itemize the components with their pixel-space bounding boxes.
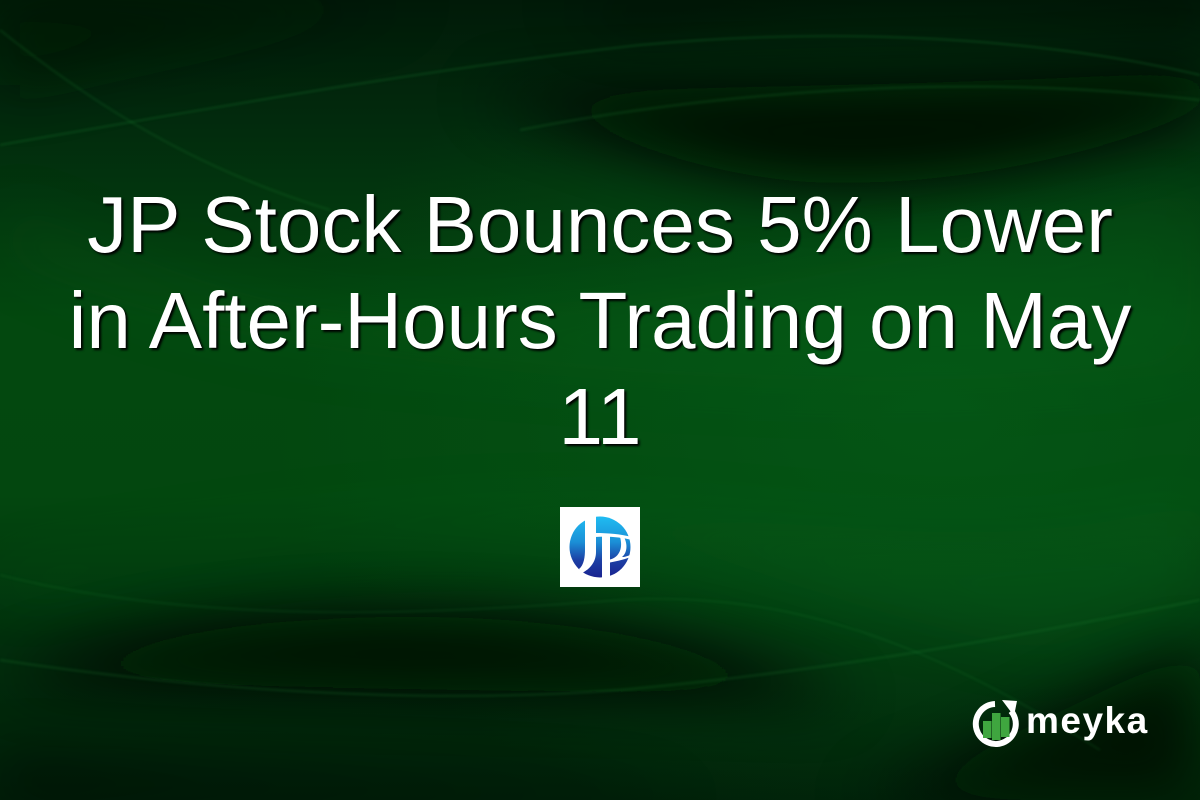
logo: meyka — [972, 700, 1149, 747]
title: JP Stock Bounces 5% Lower — [87, 180, 1113, 269]
wordmark: meyka — [1026, 700, 1149, 741]
title — [69, 180, 1134, 461]
title: in After-Hours Trading on May — [69, 276, 1131, 365]
title: 11 — [558, 372, 642, 461]
icon: ring with arrow and bars — [976, 700, 1017, 744]
icon: JP company logo — [560, 507, 640, 587]
